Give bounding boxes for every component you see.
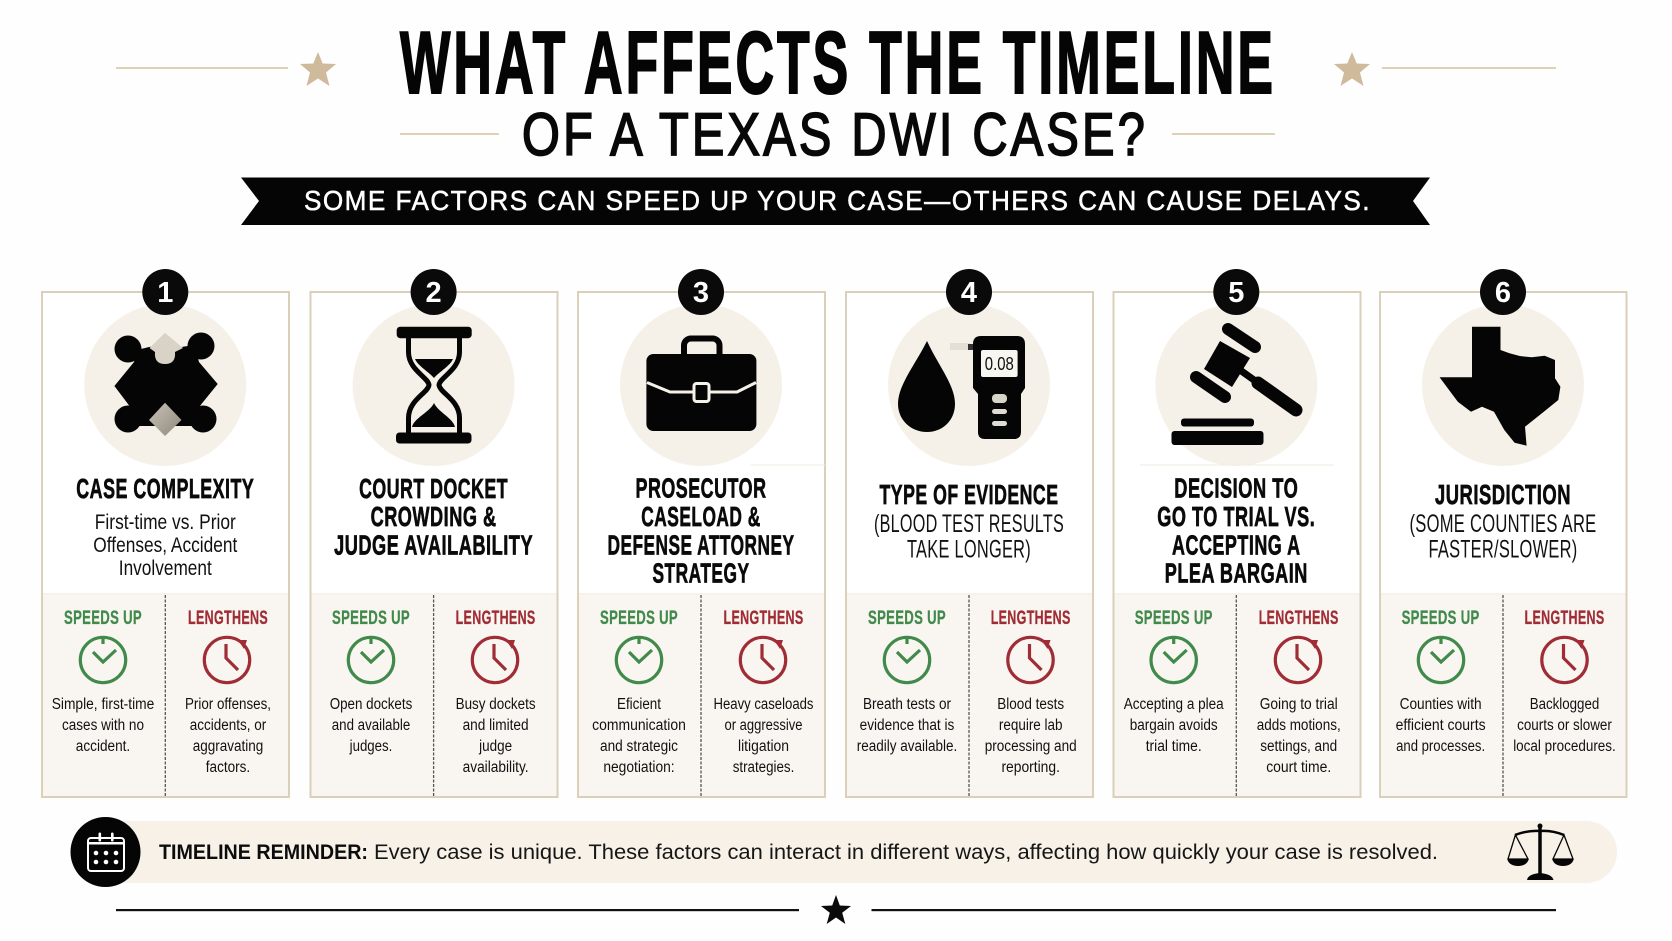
speeds up column: SPEEDS UP (868, 607, 946, 629)
speeds up column: SPEEDS UP (332, 607, 410, 629)
icon: gavel (1172, 329, 1296, 445)
lengthens column (1257, 607, 1341, 776)
lengthens column: LENGTHENS (188, 607, 268, 629)
speeds up column: evidence that is (860, 717, 955, 734)
speeds up column (592, 607, 686, 776)
speeds up column: accident. (76, 738, 130, 755)
left subtitle rule (400, 133, 499, 135)
number badge: 4 (961, 277, 977, 309)
heading: JUDGE AVAILABILITY (334, 530, 533, 560)
speeds up column: and strategic (600, 738, 678, 755)
heading: CASE COMPLEXITY (76, 473, 254, 504)
speeds up column: bargain avoids (1130, 717, 1218, 734)
lengthens column: LENGTHENS (1259, 607, 1339, 629)
lengthens column: aggravating (193, 738, 263, 755)
heading: TYPE OF EVIDENCE (880, 479, 1058, 510)
description: (BLOOD TEST RESULTS (874, 510, 1064, 538)
lengthens column: accidents, or (190, 717, 266, 734)
lengthens column: require lab (999, 717, 1063, 734)
number badge: 6 (1495, 277, 1511, 309)
speeds up column: Breath tests or (863, 696, 951, 713)
heading: DEFENSE ATTORNEY (608, 530, 794, 560)
icon: briefcase (646, 338, 756, 431)
number badge (678, 269, 724, 315)
heading: DECISION TO (1174, 473, 1298, 504)
description: TAKE LONGER) (907, 536, 1031, 564)
subtitle ribbon (241, 178, 1430, 225)
speeds up column (330, 607, 413, 755)
number badge (1480, 269, 1526, 315)
reminder label: TIMELINE REMINDER: (159, 840, 368, 864)
lengthens column: litigation (738, 738, 789, 755)
lengthens column (456, 607, 536, 776)
lengthens column: LENGTHENS (456, 607, 536, 629)
lengthens column: LENGTHENS (1524, 607, 1604, 629)
icon: hourglass (396, 327, 472, 444)
lengthens column: Blood tests (997, 696, 1064, 713)
speeds up column: Open dockets (330, 696, 413, 713)
panel: case complexity (42, 269, 289, 797)
panel: trial vs plea (1114, 269, 1360, 797)
description: FASTER/SLOWER) (1428, 536, 1578, 564)
lengthens column: settings, and (1260, 738, 1337, 755)
speeds up column: judges. (349, 738, 392, 755)
heading: PLEA BARGAIN (1165, 558, 1308, 588)
speeds up column: communication (592, 717, 686, 734)
panel: court docket crowding (310, 269, 558, 797)
speeds up column: Eficient (617, 696, 662, 713)
number badge (142, 269, 188, 315)
title line two: OF A TEXAS DWI CASE? (522, 101, 1148, 168)
lengthens column (185, 607, 271, 776)
speeds up column: SPEEDS UP (600, 607, 678, 629)
panel: prosecutor caseload (578, 269, 825, 797)
speeds up column: SPEEDS UP (1135, 607, 1213, 629)
number badge: 5 (1228, 277, 1244, 309)
speeds up column: and processes. (1396, 738, 1485, 755)
heading (334, 473, 533, 560)
subtitle ribbon: SOME FACTORS CAN SPEED UP YOUR CASE—OTHERS CAN CAUSE DELAYS. (304, 185, 1371, 216)
lengthens column: Heavy caseloads (714, 696, 814, 713)
lengthens column: local procedures. (1513, 738, 1616, 755)
lengthens column (985, 607, 1077, 776)
left title ornament (116, 52, 336, 86)
speeds up column (1124, 607, 1224, 755)
speeds up column: efficient courts (1396, 717, 1486, 734)
description (874, 510, 1064, 564)
lengthens column: adds motions, (1257, 717, 1341, 734)
icon background (620, 304, 782, 466)
number badge (411, 269, 457, 315)
panel: type of evidence (846, 269, 1093, 797)
number badge (946, 269, 992, 315)
lengthens column: LENGTHENS (991, 607, 1071, 629)
heading: ACCEPTING A (1172, 530, 1301, 560)
speeds up column: negotiation: (603, 759, 675, 776)
right subtitle rule (1172, 133, 1275, 135)
heading: PROSECUTOR (636, 473, 766, 504)
lengthens column (714, 607, 814, 776)
number badge: 2 (426, 277, 442, 309)
lengthens column (1513, 607, 1616, 755)
icon: breathalyzer (950, 336, 1025, 439)
right title ornament (1334, 52, 1556, 86)
number badge: 1 (157, 277, 173, 309)
description: Involvement (119, 557, 212, 580)
heading: JURISDICTION (1435, 479, 1571, 510)
lengthens column: court time. (1266, 759, 1331, 776)
heading: GO TO TRIAL VS. (1157, 501, 1315, 532)
speeds up column: trial time. (1146, 738, 1202, 755)
lengthens column: processing and (985, 738, 1077, 755)
icon background (1422, 304, 1584, 466)
speeds up column (1396, 607, 1486, 755)
panel: jurisdiction (1380, 269, 1626, 797)
speeds up column: and available (332, 717, 410, 734)
heading: CASELOAD & (641, 501, 761, 532)
heading: STRATEGY (652, 558, 750, 588)
lengthens column: Backlogged (1530, 696, 1599, 713)
timeline reminder bar (70, 817, 1617, 887)
lengthens column: factors. (206, 759, 250, 776)
speeds up column (52, 607, 154, 755)
description: First-time vs. Prior (95, 511, 236, 534)
description (93, 511, 237, 580)
lengthens column: Going to trial (1260, 696, 1338, 713)
heading: COURT DOCKET (359, 473, 508, 504)
icon: texas map (1440, 327, 1560, 446)
icon background (84, 304, 246, 466)
bottom divider with star (116, 895, 1556, 924)
lengthens column: Prior offenses, (185, 696, 271, 713)
lengthens column: reporting. (1001, 759, 1060, 776)
lengthens column: or aggressive (724, 717, 802, 734)
speeds up column: SPEEDS UP (64, 607, 142, 629)
icon background (353, 304, 515, 466)
description (1410, 510, 1596, 564)
lengthens column: strategies. (733, 759, 794, 776)
heading: CROWDING & (371, 501, 497, 532)
speeds up column: cases with no (62, 717, 144, 734)
reminder text: Every case is unique. These factors can interact in different ways, affecting how quickly your case is resolved. (374, 840, 1438, 864)
lengthens column: availability. (463, 759, 529, 776)
speeds up column: readily available. (857, 738, 957, 755)
icon: blood drop (898, 341, 955, 432)
lengthens column: courts or slower (1517, 717, 1612, 734)
icon background (1155, 304, 1317, 466)
speeds up column: Counties with (1400, 696, 1482, 713)
speeds up column (857, 607, 957, 755)
icon: breathalyzer: 0.08 (985, 354, 1014, 374)
lengthens column: Busy dockets (456, 696, 536, 713)
title (400, 13, 1276, 168)
icon background (888, 304, 1050, 466)
icon: scales of justice (1508, 824, 1574, 880)
speeds up column: Simple, first-time (52, 696, 154, 713)
lengthens column: judge (478, 738, 512, 755)
heading (608, 473, 794, 588)
lengthens column: and limited (463, 717, 529, 734)
number badge (1213, 269, 1259, 315)
number badge: 3 (693, 277, 709, 309)
icon: calendar (70, 817, 140, 887)
lengthens column: LENGTHENS (724, 607, 804, 629)
heading (1157, 473, 1315, 588)
speeds up column: Accepting a plea (1124, 696, 1224, 713)
speeds up column: SPEEDS UP (1402, 607, 1480, 629)
icon: puzzle piece (114, 332, 218, 436)
description: Offenses, Accident (93, 534, 237, 557)
